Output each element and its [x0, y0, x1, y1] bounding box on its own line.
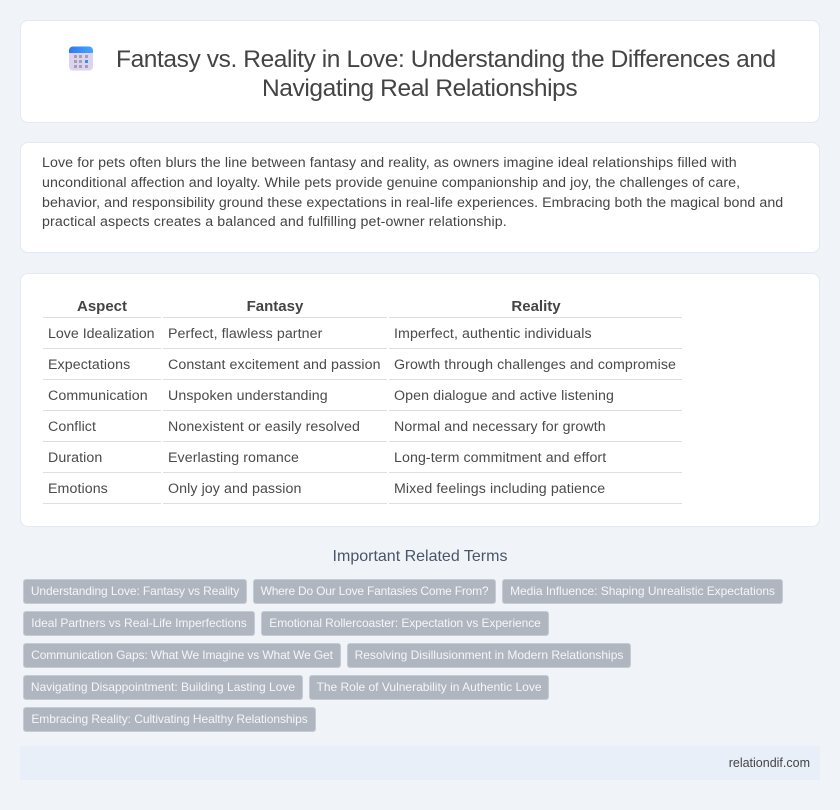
- title: Navigating Real Relationships: [262, 75, 577, 102]
- table: Emotions: [48, 481, 108, 497]
- tags: related terms: Where Do Our Love Fantasies Come From?: [261, 584, 488, 598]
- tags: related terms: Embracing Reality: Cultivating Healthy Relationships: [31, 712, 308, 726]
- icon: calendar: [69, 46, 93, 70]
- panel: comparison table: [20, 273, 820, 527]
- table: Unspoken understanding: [168, 388, 328, 404]
- intro text: [42, 155, 783, 230]
- table: Fantasy: [247, 298, 303, 315]
- table: Communication: [48, 388, 148, 404]
- table: Normal and necessary for growth: [394, 419, 606, 435]
- table: Constant excitement and passion: [168, 357, 381, 373]
- tags: related terms: Media Influence: Shaping Unrealistic Expectations: [510, 584, 775, 598]
- intro text: practical aspects creates a balanced and fulfilling pet-owner relationship.: [42, 214, 507, 230]
- heading: related terms: Important Related Terms: [333, 548, 507, 565]
- table: Reality: [511, 298, 561, 315]
- table: Duration: [48, 450, 102, 466]
- footer: relationdif.com: [729, 756, 810, 770]
- tags: related terms: [23, 579, 783, 732]
- table: Everlasting romance: [168, 450, 299, 466]
- table: Expectations: [48, 357, 130, 373]
- table: Open dialogue and active listening: [394, 388, 614, 404]
- intro text: unconditional affection and loyalty. While pets provide genuine companionship and joy, the challenges of care,: [42, 175, 740, 191]
- title: [116, 46, 776, 102]
- tags: related terms: Ideal Partners vs Real-Life Imperfections: [31, 616, 247, 630]
- table: Long-term commitment and effort: [394, 450, 606, 466]
- table: Imperfect, authentic individuals: [394, 326, 592, 342]
- tags: related terms: Understanding Love: Fantasy vs Reality: [31, 584, 239, 598]
- table: Conflict: [48, 419, 96, 435]
- tags: related terms: The Role of Vulnerability in Authentic Love: [316, 680, 542, 694]
- panel: header: [20, 20, 820, 123]
- table: [43, 298, 682, 504]
- table: Growth through challenges and compromise: [394, 357, 676, 373]
- footer: [20, 746, 820, 780]
- intro text: Love for pets often blurs the line between fantasy and reality, as owners imagine ideal relationships filled with: [42, 155, 737, 171]
- tags: related terms: Navigating Disappointment: Building Lasting Love: [31, 680, 295, 694]
- table: Perfect, flawless partner: [168, 326, 322, 342]
- tags: related terms: Emotional Rollercoaster: Expectation vs Experience: [269, 616, 541, 630]
- panel: intro: [20, 142, 820, 253]
- tags: related terms: Communication Gaps: What We Imagine vs What We Get: [31, 648, 333, 662]
- table: Nonexistent or easily resolved: [168, 419, 360, 435]
- tags: related terms: Resolving Disillusionment in Modern Relationships: [355, 648, 623, 662]
- table: Mixed feelings including patience: [394, 481, 605, 497]
- table: Love Idealization: [48, 326, 154, 342]
- intro text: behavior, and responsibility ground these expectations in real-life experiences. Embracing both the magical bond and: [42, 195, 783, 211]
- table: Aspect: [77, 298, 127, 315]
- title: Fantasy vs. Reality in Love: Understanding the Differences and: [116, 46, 776, 73]
- table: Only joy and passion: [168, 481, 302, 497]
